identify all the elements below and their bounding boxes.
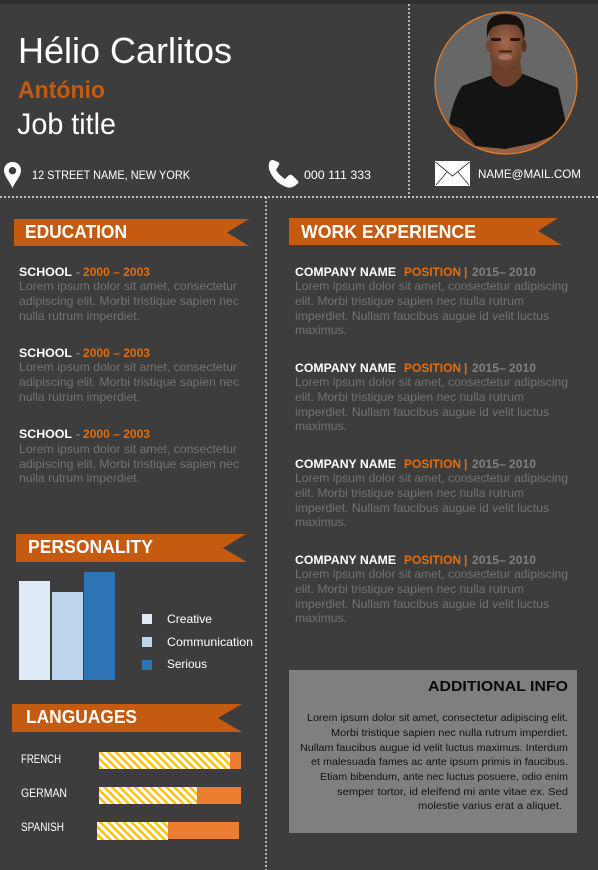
personality heading ribbon: PERSONALITY <box>28 537 153 557</box>
job entry 2: maximus. <box>295 419 347 433</box>
job entry 3: POSITION <box>404 457 461 471</box>
job entry 4: POSITION <box>404 553 461 567</box>
job title: Job title <box>17 108 116 141</box>
education entry 2: Lorem ipsum dolor sit amet, consectetur <box>19 360 237 374</box>
education entry 2 <box>19 346 239 404</box>
education entry 2: adipiscing elit. Morbi tristique sapien nec <box>19 375 239 389</box>
job entry 4: maximus. <box>295 611 347 625</box>
additional info text: Nullam faucibus augue id velit luctus maximus. Interdum <box>300 742 568 754</box>
education entry 1: - <box>76 265 80 279</box>
job entry 1: POSITION <box>404 265 461 279</box>
job entry 1: 2015– 2010 <box>472 265 536 279</box>
education entry 3: nulla rutrum imperdiet. <box>19 471 140 485</box>
name: Hélio Carlitos <box>18 30 232 71</box>
job entry 1: COMPANY NAME <box>295 265 396 279</box>
language bar: german <box>21 786 241 804</box>
language bar: spanish: SPANISH <box>21 820 64 834</box>
icon: location pin <box>4 162 21 188</box>
personality heading ribbon <box>16 534 247 562</box>
work experience heading ribbon <box>289 218 562 245</box>
job entry 3: 2015– 2010 <box>472 457 536 471</box>
job entry 4: 2015– 2010 <box>472 553 536 567</box>
languages heading ribbon <box>12 704 242 732</box>
additional info text: Morbi tristique sapien nec nulla rutrum imperdiet. <box>331 727 568 739</box>
work experience heading ribbon: WORK EXPERIENCE <box>301 222 476 242</box>
middle name: António <box>18 77 105 104</box>
language bar: french <box>21 752 241 769</box>
education entry 2: 2000 – 2003 <box>83 346 150 360</box>
email: NAME@MAIL.COM <box>478 167 581 181</box>
education entry 1: Lorem ipsum dolor sit amet, consectetur <box>19 279 237 293</box>
header: name and job title <box>17 30 232 141</box>
chart legend: Serious <box>167 657 207 671</box>
address: 12 STREET NAME, NEW YORK <box>32 168 190 182</box>
panel: languages <box>12 704 242 840</box>
icon: envelope <box>435 161 470 186</box>
job entry 2: elit. Morbi tristique sapien nec nulla rutrum <box>295 390 524 404</box>
education entry 2: - <box>76 346 80 360</box>
job entry 3: Lorem ipsum dolor sit amet, consectetur adipiscing <box>295 471 568 485</box>
education entry 3 <box>19 427 239 485</box>
education entry 1: adipiscing elit. Morbi tristique sapien nec <box>19 294 239 308</box>
job entry 3: | <box>464 457 467 471</box>
job entry 4: imperdiet. Nullam faucibus augue id velit luctus <box>295 597 549 611</box>
panel: additional info <box>289 670 577 833</box>
icon: phone <box>269 160 298 188</box>
education entry 3: - <box>76 427 80 441</box>
job entry 1: elit. Morbi tristique sapien nec nulla rutrum <box>295 294 524 308</box>
education entry 1 <box>19 265 239 323</box>
language bar: french: FRENCH <box>21 752 61 766</box>
education entry 1: 2000 – 2003 <box>83 265 150 279</box>
job entry 1: | <box>464 265 467 279</box>
additional info text: Lorem ipsum dolor sit amet, consectetur adipiscing elit. <box>307 712 568 724</box>
panel: education <box>14 219 249 485</box>
language bar: german: GERMAN <box>21 786 67 800</box>
job entry 3: maximus. <box>295 515 347 529</box>
education entry 1: SCHOOL <box>19 265 72 279</box>
education entry 1: nulla rutrum imperdiet. <box>19 309 140 323</box>
job entry 4: COMPANY NAME <box>295 553 396 567</box>
education entry 3: SCHOOL <box>19 427 72 441</box>
job entry 3 <box>295 457 568 529</box>
job entry 3: COMPANY NAME <box>295 457 396 471</box>
job entry 2: COMPANY NAME <box>295 361 396 375</box>
bar chart <box>19 572 115 680</box>
panel: personality <box>16 534 253 680</box>
education heading ribbon: EDUCATION <box>25 222 127 242</box>
contact row <box>4 160 581 188</box>
chart legend: Communication <box>167 635 253 649</box>
chart legend: Creative <box>167 612 212 626</box>
job entry 2 <box>295 361 568 433</box>
education entry 3: 2000 – 2003 <box>83 427 150 441</box>
additional info text: Etiam bibendum, ante nec luctus posuere, odio enim <box>320 771 568 783</box>
job entry 4 <box>295 553 568 625</box>
additional info text <box>300 712 568 812</box>
job entry 1 <box>295 265 568 337</box>
job entry 1: Lorem ipsum dolor sit amet, consectetur adipiscing <box>295 279 568 293</box>
additional info text: molestie varius erat a aliquet. <box>418 800 562 812</box>
job entry 2: POSITION <box>404 361 461 375</box>
education heading ribbon <box>14 219 249 246</box>
language bar: spanish <box>21 820 239 840</box>
phone number: 000 111 333 <box>304 168 371 182</box>
job entry 1: imperdiet. Nullam faucibus augue id velit luctus <box>295 309 549 323</box>
job entry 4: elit. Morbi tristique sapien nec nulla rutrum <box>295 582 524 596</box>
job entry 2: | <box>464 361 467 375</box>
additional info heading: ADDITIONAL INFO <box>428 678 568 695</box>
languages heading ribbon: LANGUAGES <box>26 707 137 727</box>
profile photo <box>435 12 577 160</box>
job entry 3: imperdiet. Nullam faucibus augue id velit luctus <box>295 501 549 515</box>
chart legend <box>142 612 253 671</box>
job entry 3: elit. Morbi tristique sapien nec nulla rutrum <box>295 486 524 500</box>
education entry 3: Lorem ipsum dolor sit amet, consectetur <box>19 442 237 456</box>
education entry 2: nulla rutrum imperdiet. <box>19 390 140 404</box>
job entry 1: maximus. <box>295 323 347 337</box>
education entry 3: adipiscing elit. Morbi tristique sapien nec <box>19 457 239 471</box>
job entry 2: 2015– 2010 <box>472 361 536 375</box>
panel: work experience <box>289 218 568 625</box>
additional info text: et malesuada fames ac ante ipsum primis in faucibus. <box>311 756 568 768</box>
education entry 2: SCHOOL <box>19 346 72 360</box>
job entry 2: Lorem ipsum dolor sit amet, consectetur adipiscing <box>295 375 568 389</box>
additional info text: semper tortor, id eleifend mi ante vitae ex. Sed <box>337 786 568 798</box>
job entry 4: | <box>464 553 467 567</box>
job entry 2: imperdiet. Nullam faucibus augue id velit luctus <box>295 405 549 419</box>
job entry 4: Lorem ipsum dolor sit amet, consectetur adipiscing <box>295 567 568 581</box>
